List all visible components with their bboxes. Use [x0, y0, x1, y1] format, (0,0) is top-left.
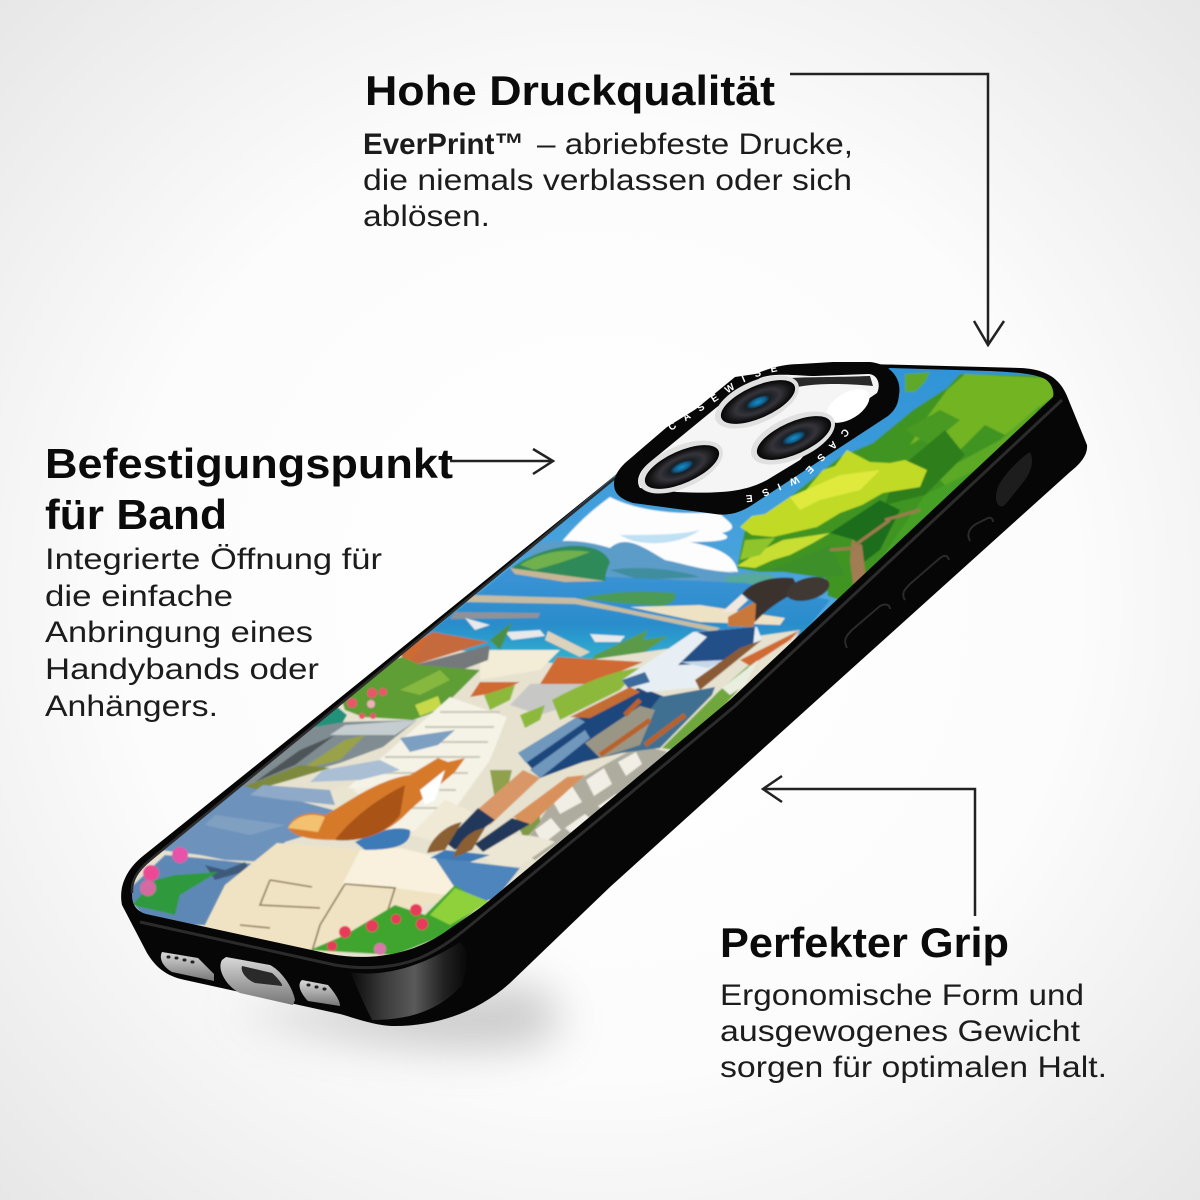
side button: action [968, 518, 993, 541]
text block: strap opening: Anbringung eines [45, 616, 313, 649]
distant greenery [590, 630, 668, 662]
rose flowers [347, 688, 387, 719]
bottom left flowers [132, 847, 218, 915]
dark lower foliage [830, 500, 900, 565]
island [510, 546, 610, 581]
sky [418, 368, 1040, 642]
girl blouse [622, 627, 762, 692]
port: charging [220, 957, 295, 1005]
girl skirt [518, 687, 665, 778]
text block: strap opening: Anhängers. [45, 690, 218, 723]
text block: strap opening: die einfache [45, 580, 233, 613]
artwork printed on case [132, 368, 1054, 957]
case side rim [140, 400, 1062, 968]
screen edge line [132, 478, 615, 893]
side button: volume [903, 556, 949, 600]
flash [821, 382, 875, 430]
teal leaves [314, 707, 348, 728]
glossy corner highlight [350, 942, 467, 1020]
girl head [722, 573, 832, 627]
text block: grip: sorgen für optimalen Halt. [720, 1051, 1107, 1084]
island inner shade [762, 376, 873, 392]
text block: EverPrint [363, 128, 853, 233]
heading: Befestigungspunkt für Band: Befestigungspunkt [45, 440, 453, 487]
trunk [850, 540, 866, 590]
cream paving stones [205, 843, 463, 958]
arrow: strap point [450, 449, 553, 474]
blue stone bottom right [435, 858, 520, 900]
camera island: CASEWISE [746, 430, 848, 502]
arrow: grip [763, 776, 975, 916]
small foliage patch by sky [905, 372, 930, 392]
lens: left [631, 430, 731, 504]
text block: EverPrint: – abriebfeste Drucke, [537, 128, 853, 161]
island frame [614, 362, 899, 515]
mountains [525, 541, 760, 585]
ground [110, 630, 800, 965]
clouds [562, 496, 739, 574]
port: right speaker [300, 980, 340, 1006]
side grip sheen [996, 452, 1032, 506]
arrow: print quality [790, 74, 1004, 345]
tree [737, 372, 1056, 600]
phone shadow [230, 985, 560, 1050]
beach [480, 650, 560, 680]
heading: Befestigungspunkt für Band [45, 440, 453, 538]
heading: Befestigungspunkt für Band: für Band [45, 491, 227, 538]
case body [121, 363, 1087, 1026]
text block: strap opening: Handybands oder [45, 653, 319, 686]
cat [288, 758, 465, 840]
boulder [520, 834, 555, 858]
camera island: CASEWISE [668, 367, 778, 430]
roofs [400, 630, 800, 697]
stone wall left [242, 719, 416, 788]
text block: grip: ausgewogenes Gewicht [720, 1015, 1081, 1048]
brand text bottom [680, 428, 845, 502]
lens: top [707, 365, 807, 439]
breakwater [466, 595, 720, 632]
panel: phone with case [121, 362, 1088, 1070]
sea [428, 569, 830, 663]
upper foliage [910, 374, 1054, 450]
stone wall right [520, 745, 668, 860]
heading: Perfekter Grip: Perfekter Grip [720, 919, 1009, 966]
blue stones [160, 785, 340, 862]
text block: grip: Ergonomische Form und [720, 979, 1084, 1012]
text block: strap opening: Integrierte Öffnung für [45, 543, 382, 576]
text block: grip [720, 979, 1107, 1084]
shadow blue bottom left [132, 854, 252, 926]
island interior [638, 374, 879, 493]
text block: EverPrint: EverPrint™ [363, 128, 524, 161]
text block: strap opening [45, 543, 382, 723]
camera island [614, 362, 900, 515]
text block: EverPrint: ablösen. [363, 200, 490, 233]
heading: Hohe Druckqualität: Hohe Druckqualität [365, 67, 775, 114]
port: left speaker [161, 952, 214, 981]
stone stairs [345, 697, 507, 835]
small island [580, 592, 675, 606]
brand text top [671, 366, 835, 431]
girl legs [427, 770, 585, 858]
house walls [418, 644, 491, 670]
lens: right [743, 401, 843, 475]
stair lower stones [352, 788, 440, 792]
tree mass [737, 374, 1056, 600]
green strip right of bag [662, 664, 750, 752]
bushes [340, 657, 480, 720]
harbour [450, 612, 540, 619]
stair shadow [400, 730, 455, 752]
side button: power [845, 605, 890, 648]
girl arm [570, 687, 640, 718]
bottom right flowers [310, 885, 490, 955]
roof texture left [412, 633, 488, 664]
girl bag [585, 687, 715, 758]
yellow foliage [740, 450, 927, 537]
text block: EverPrint: die niemals verblassen oder sich [363, 164, 852, 197]
